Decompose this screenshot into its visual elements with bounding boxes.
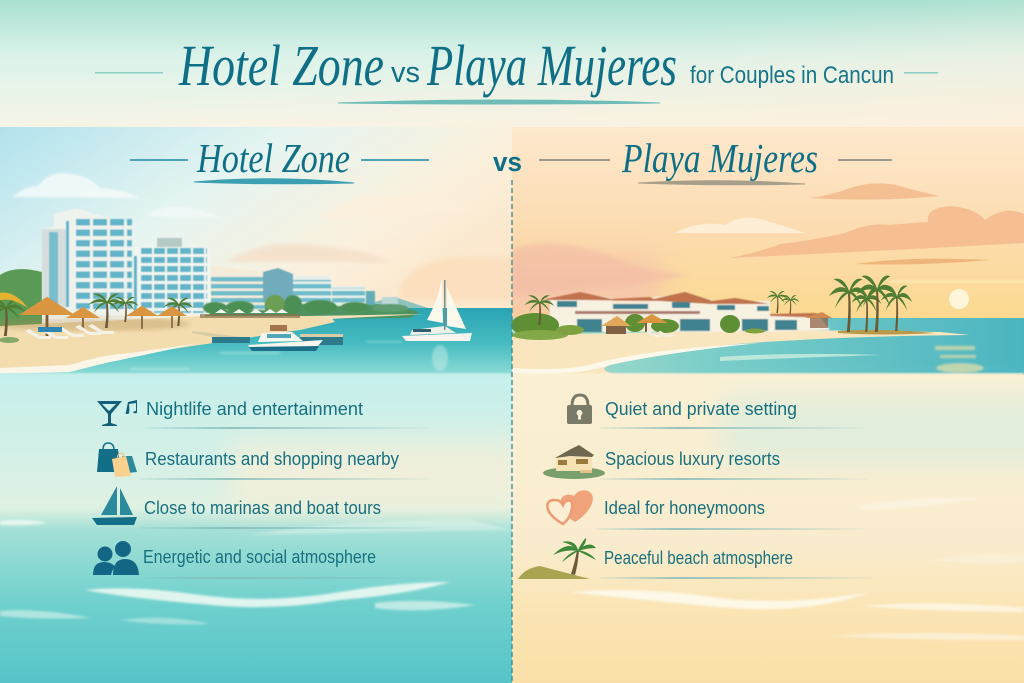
heading: Playa Mujeres [539, 135, 892, 185]
list: Playa Mujeres features [518, 395, 872, 579]
beach huts and loungers [601, 312, 832, 337]
title: right flourish [904, 72, 938, 74]
icon: two people [93, 541, 139, 575]
item: Peaceful beach atmosphere: Peaceful beach atmosphere [604, 548, 793, 568]
water highlights [130, 341, 448, 371]
waves left [0, 520, 512, 624]
wooden pier [192, 331, 343, 345]
row lines right [595, 427, 872, 579]
sky right [512, 127, 1024, 319]
sea right [512, 318, 1024, 378]
tall hotel tower [42, 208, 133, 312]
title: Hotel Zone: Hotel Zone [178, 33, 384, 98]
spit and palms [829, 276, 935, 334]
beach left [0, 316, 335, 370]
item: Spacious luxury resorts: Spacious luxury resorts [605, 449, 780, 469]
title: left flourish [95, 72, 163, 74]
icon: cocktail and music note [97, 400, 137, 426]
item: Ideal for honeymoons: Ideal for honeymoons [604, 498, 765, 518]
title: Playa Mujeres: Playa Mujeres [426, 33, 677, 98]
setting sun [949, 289, 969, 309]
beachfront resort [546, 292, 833, 332]
heading: Hotel Zone [130, 135, 429, 184]
clouds left [12, 173, 512, 300]
title: for Couples in Cancun: for Couples in Cancun [690, 62, 894, 89]
low-rise hotels [211, 266, 398, 310]
centre dashed divider [511, 180, 513, 683]
panel: Hotel Zone [0, 127, 530, 683]
header band [0, 0, 1024, 128]
icon: sailboat [92, 486, 137, 525]
item: Energetic and social atmosphere: Energetic and social atmosphere [143, 547, 376, 567]
list: Hotel Zone features [92, 399, 430, 579]
sea left [0, 308, 512, 376]
icon: shopping bags [97, 443, 137, 477]
tree line [203, 295, 408, 315]
title: underline swash [338, 100, 660, 104]
sky left [0, 127, 512, 317]
heading: Hotel Zone: Hotel Zone [196, 135, 350, 181]
icon: two hearts [547, 490, 593, 524]
distant headland [355, 297, 428, 308]
icon: resort villa [543, 445, 605, 479]
item: Nightlife and entertainment: Nightlife and entertainment [146, 399, 363, 419]
title [95, 33, 938, 104]
heading: Playa Mujeres: Playa Mujeres [621, 135, 818, 181]
item: Quiet and private setting: Quiet and private setting [605, 399, 797, 419]
panel: Playa Mujeres [490, 127, 1024, 683]
sun glitter [935, 346, 984, 373]
title: vs: vs [391, 57, 420, 89]
row lines left [140, 427, 430, 579]
sun loungers [0, 324, 114, 343]
item: Close to marinas and boat tours: Close to marinas and boat tours [144, 498, 381, 518]
motor yacht [248, 325, 323, 351]
garden shrubs [511, 313, 765, 340]
second hotel tower [134, 238, 210, 315]
resort palms [525, 291, 799, 325]
tree backdrop [0, 269, 420, 330]
lower panel background right [512, 373, 1024, 683]
icon: palm on island [518, 538, 596, 579]
lower panel background left [0, 373, 530, 683]
clouds right [512, 183, 1024, 295]
item: Restaurants and shopping nearby: Restaurants and shopping nearby [145, 449, 399, 469]
icon: padlock [567, 395, 592, 424]
sailboat [402, 278, 472, 341]
beach umbrellas and palms [0, 292, 300, 337]
beach right [512, 330, 970, 378]
vs label: vs [493, 147, 522, 177]
waves right [570, 497, 1024, 640]
